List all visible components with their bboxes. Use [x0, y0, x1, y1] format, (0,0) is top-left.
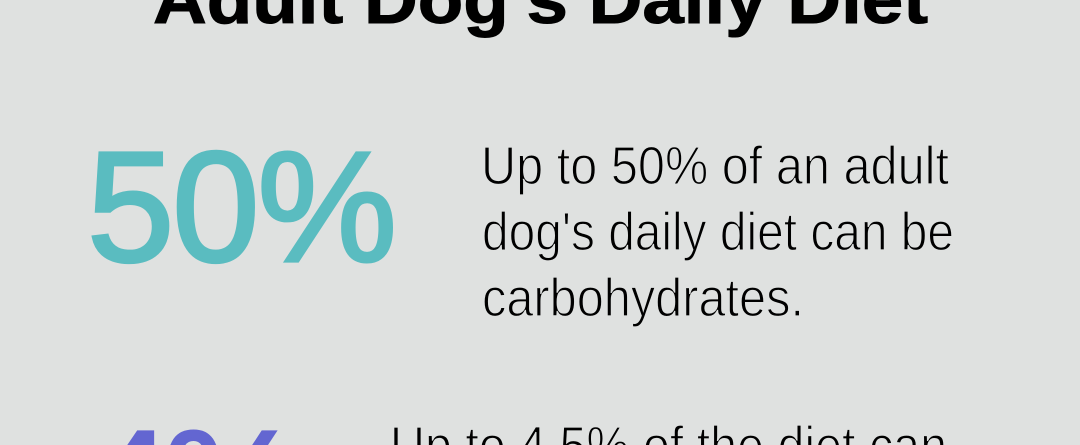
stat number: 50%: 50%	[87, 120, 397, 295]
text block: carbohydrates description: Up to 50% of an adult	[481, 136, 949, 196]
panel: fat stat	[85, 399, 947, 445]
panel: carbohydrates stat	[87, 120, 954, 328]
text block: carbohydrates description	[481, 136, 954, 328]
text block: carbohydrates description: dog's daily diet can be	[482, 202, 954, 262]
text block: carbohydrates description: carbohydrates.	[482, 268, 804, 328]
